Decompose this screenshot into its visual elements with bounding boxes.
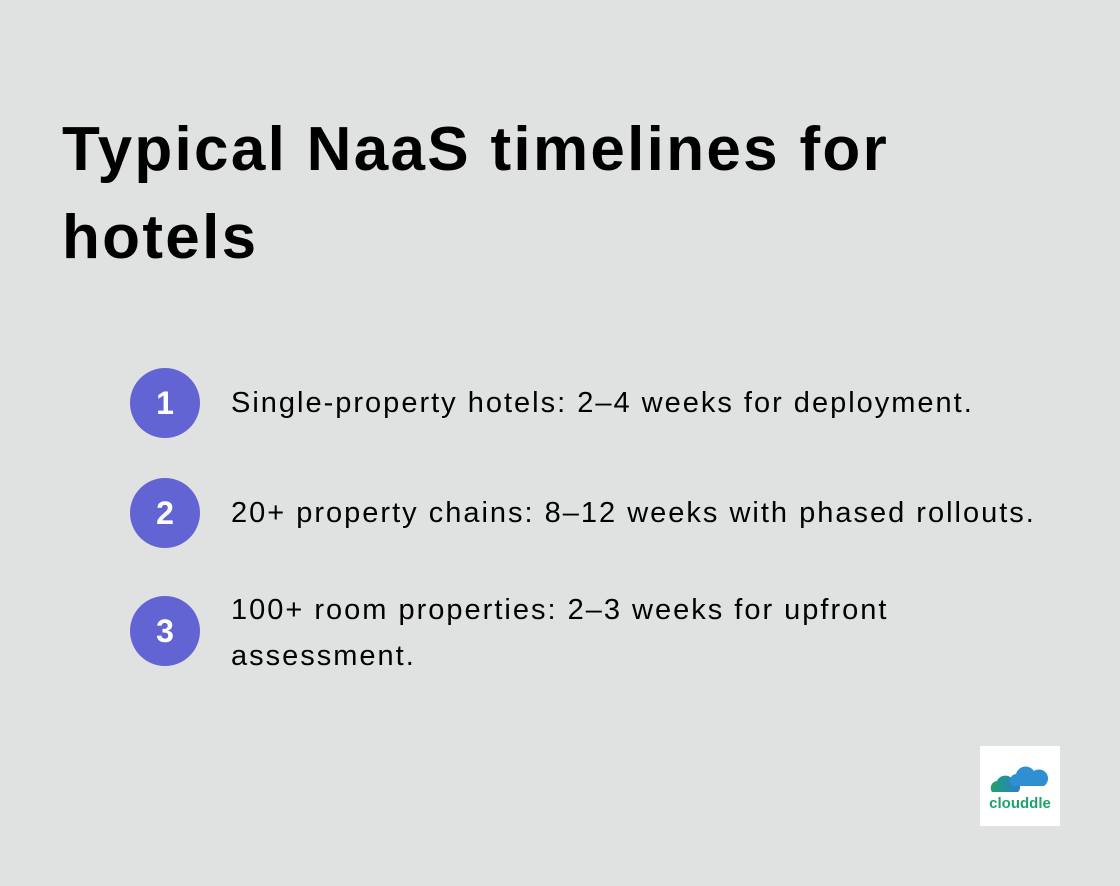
number circle 1: 1 — [156, 385, 174, 421]
number circle 2 — [130, 478, 200, 548]
item 1 — [130, 368, 974, 438]
title: Typical NaaS timelines for hotels — [62, 115, 889, 272]
number circle 1 — [130, 368, 200, 438]
logo — [980, 746, 1060, 826]
text 2: 20+ property chains: 8–12 weeks with phased rollouts. — [231, 497, 1036, 529]
number circle 3: 3 — [156, 613, 174, 649]
number circle 3 — [130, 596, 200, 666]
item 3 — [130, 594, 888, 672]
logo: clouddle — [989, 795, 1051, 812]
text 1: Single-property hotels: 2–4 weeks for deployment. — [231, 387, 974, 419]
item 2 — [130, 478, 1036, 548]
text 3: 100+ room properties: 2–3 weeks for upfront assessment. — [231, 594, 888, 672]
number circle 2: 2 — [156, 495, 174, 531]
